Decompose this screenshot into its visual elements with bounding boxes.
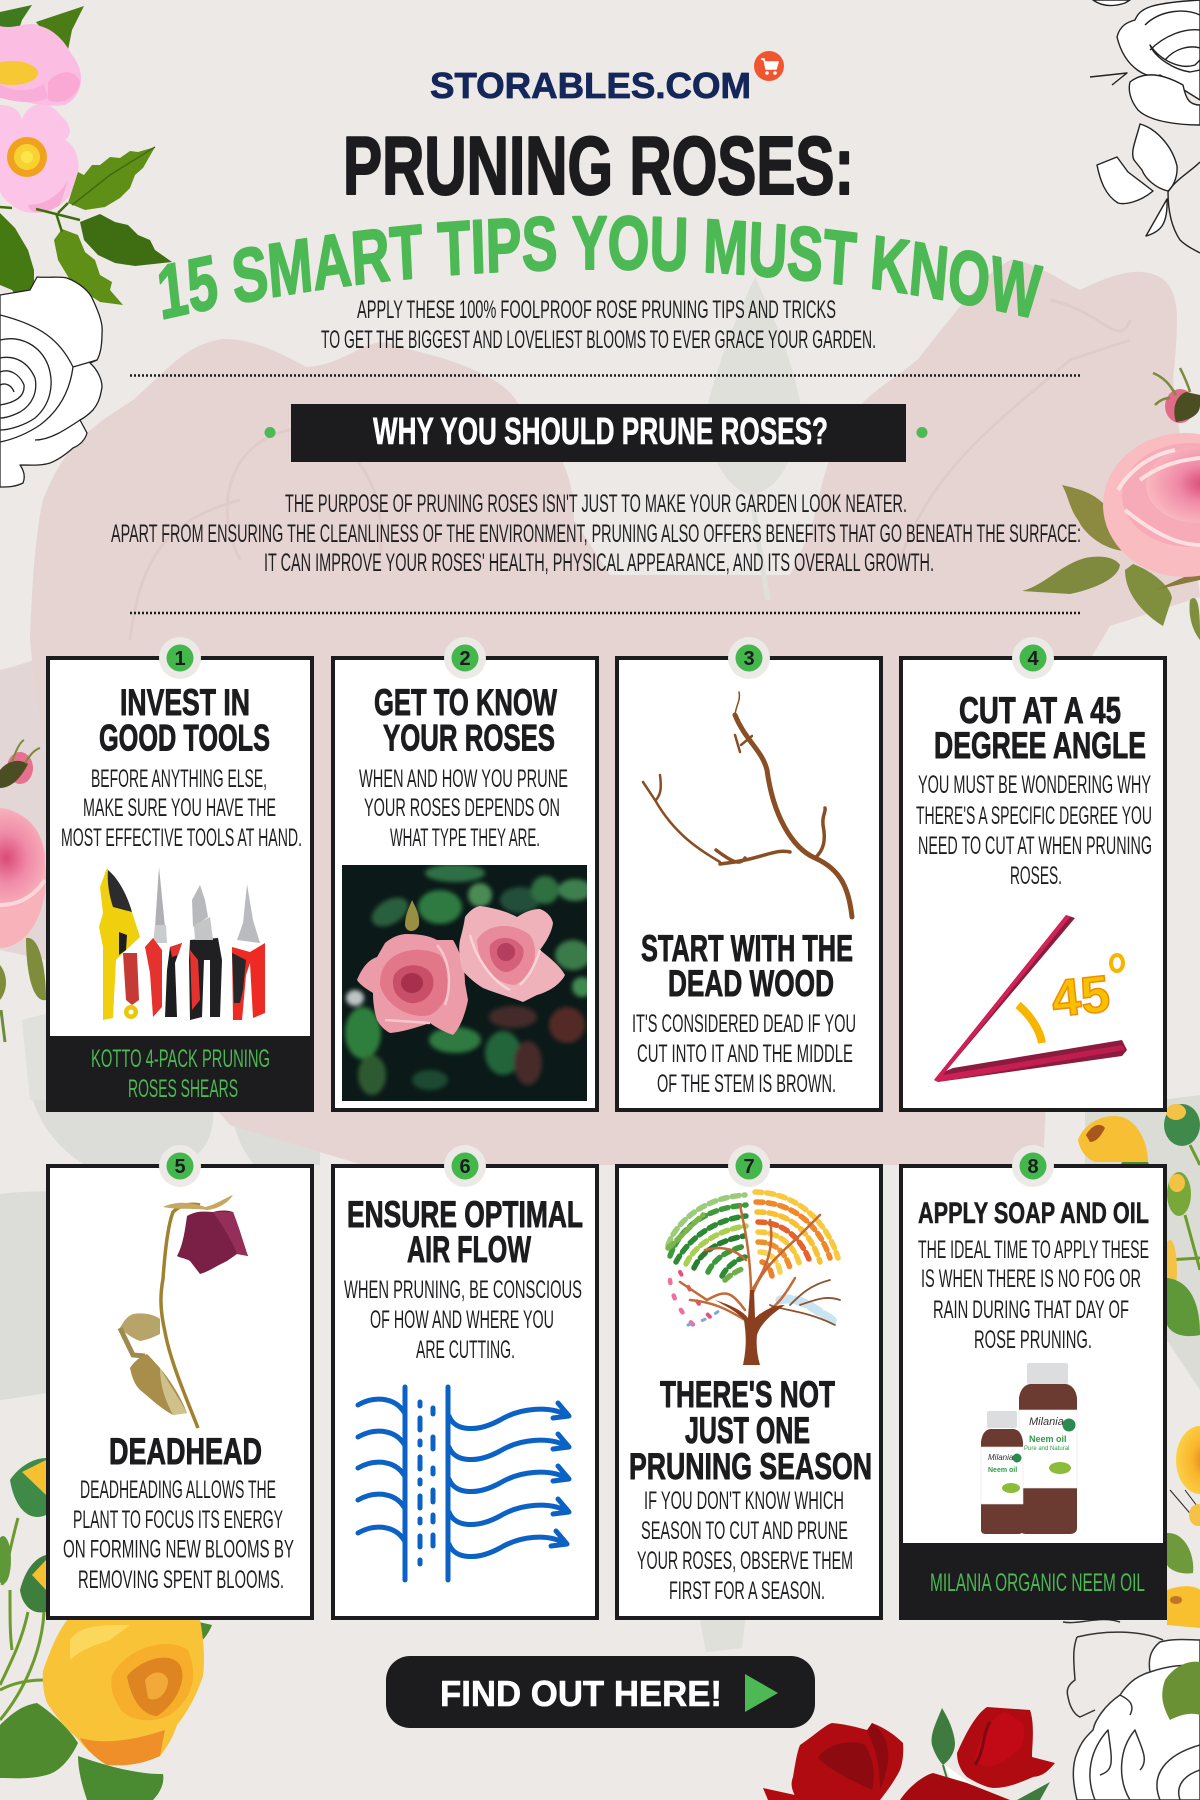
panel: tip 4: ROSES.	[1010, 862, 1062, 890]
panel: tip 1	[46, 637, 314, 1112]
panel: tip 1: GOOD TOOLS	[99, 718, 270, 758]
decoration: bottom-right line-art rose	[1063, 1619, 1200, 1800]
decoration: bottom red roses	[763, 1707, 1055, 1800]
panel: tip 6: ARE CUTTING.	[416, 1336, 515, 1364]
icon: wilted rose	[120, 1195, 248, 1428]
panel: tip 3: IT'S CONSIDERED DEAD IF YOU	[632, 1010, 856, 1038]
icon: neem oil bottles: Neem oil	[1029, 1434, 1067, 1444]
panel: tip 2: 2	[459, 648, 471, 670]
panel: tip 2: WHEN AND HOW YOU PRUNE	[359, 765, 568, 793]
background: faded rose and leaves	[0, 259, 1200, 1652]
panel: tip 1: MOST EFFECTIVE TOOLS AT HAND.	[61, 824, 302, 852]
panel: tip 7: SEASON TO CUT AND PRUNE	[641, 1517, 848, 1545]
panel: tip 7: THERE'S NOT	[660, 1374, 835, 1415]
panel: tip 5: DEADHEADING ALLOWS THE	[80, 1476, 276, 1504]
call to action button	[386, 1656, 815, 1728]
photo: pink roses	[342, 864, 592, 1101]
panel: tip 7	[617, 1145, 881, 1618]
panel: tip 7: IF YOU DON'T KNOW WHICH	[644, 1487, 844, 1515]
petals of lower flower	[0, 104, 78, 213]
panel: tip 6: 6	[459, 1156, 471, 1178]
panel: tip 8	[899, 1145, 1167, 1620]
panel: tip 3: OF THE STEM IS BROWN.	[657, 1070, 836, 1098]
panel: tip 7: PRUNING SEASON	[629, 1446, 872, 1487]
intro text	[321, 296, 876, 354]
icon: neem oil bottles: Milania	[1029, 1416, 1064, 1428]
panel: tip 1: INVEST IN	[120, 682, 250, 723]
icon: dead branch	[643, 692, 852, 917]
panel: tip 4: 4	[1027, 648, 1039, 670]
panel: tip 7: YOUR ROSES, OBSERVE THEM	[637, 1547, 853, 1575]
logo: STORABLES.COM	[430, 65, 751, 106]
decoration: top-left wild pink roses and leaves	[0, 5, 172, 313]
panel: tip 2: GET TO KNOW	[374, 682, 557, 723]
icon: four-season tree	[668, 1192, 840, 1365]
intro text: APPLY THESE 100% FOOLPROOF ROSE PRUNING TIPS AND TRICKS	[357, 296, 836, 324]
serrated leaves	[68, 147, 155, 210]
panel: tip 2: YOUR ROSES	[383, 718, 555, 758]
title: PRUNING ROSES:	[343, 119, 854, 212]
panel: tip 3: START WITH THE	[641, 928, 853, 969]
panel: tip 5: PLANT TO FOCUS ITS ENERGY	[73, 1506, 283, 1534]
curved subtitle: 15 SMART TIPS YOU MUST KNOW	[158, 215, 1044, 320]
icon: neem oil bottles: Milania	[988, 1453, 1014, 1462]
icon: play arrow	[745, 1674, 778, 1712]
decoration: top-right line-art rose	[1090, 0, 1200, 253]
decoration: bottom-left yellow rose	[0, 1620, 212, 1800]
panel: tip 4	[901, 637, 1165, 1110]
panel: tip 4: CUT AT A 45	[959, 690, 1121, 731]
icon: neem oil bottles: Pure and Natural	[1024, 1446, 1069, 1452]
panel: tip 2: WHAT TYPE THEY ARE.	[390, 824, 540, 852]
panel: tip 1: ROSES SHEARS	[128, 1075, 238, 1103]
logo	[430, 51, 784, 106]
call to action button: FIND OUT HERE!	[440, 1673, 722, 1714]
decoration: right yellow roses and foliage	[1078, 1104, 1200, 1628]
icon: 45 degree angle	[934, 915, 1127, 1082]
panel: tip 5: ON FORMING NEW BLOOMS BY	[63, 1536, 294, 1564]
panel: tip 7: JUST ONE	[685, 1410, 810, 1451]
decoration: right pink rose, bud and leaves	[1022, 368, 1200, 640]
panel: tip 3: 3	[743, 648, 755, 670]
panel: tip 6: ENSURE OPTIMAL	[347, 1194, 583, 1235]
section banner	[264, 404, 928, 462]
panel: tip 2: YOUR ROSES DEPENDS ON	[364, 794, 560, 822]
icon: air flow	[358, 1387, 569, 1580]
panel: tip 3	[617, 637, 881, 1110]
icon: neem oil bottles: Neem oil	[988, 1467, 1017, 1474]
panel: tip 1: MAKE SURE YOU HAVE THE	[83, 794, 276, 822]
panel: tip 6: WHEN PRUNING, BE CONSCIOUS	[344, 1276, 582, 1304]
icon: neem oil bottles	[981, 1363, 1077, 1534]
panel: tip 3: CUT INTO IT AND THE MIDDLE	[637, 1040, 853, 1068]
decoration: left yellow buds and stems	[0, 1458, 46, 1720]
panel: tip 8: 8	[1027, 1156, 1039, 1178]
icon: 45 degree angle: 45	[1049, 965, 1113, 1029]
panel: tip 7: FIRST FOR A SEASON.	[669, 1577, 825, 1605]
panel: tip 7: 7	[743, 1156, 755, 1178]
section banner: WHY YOU SHOULD PRUNE ROSES?	[373, 411, 828, 453]
panel: tip 8: ROSE PRUNING.	[974, 1326, 1092, 1354]
icon: pruning shears	[99, 867, 265, 1020]
panel: tip 6	[333, 1145, 597, 1618]
panel: tip 6: AIR FLOW	[407, 1229, 531, 1270]
panel: tip 1: BEFORE ANYTHING ELSE,	[91, 765, 267, 793]
icon: cart badge	[754, 51, 784, 81]
petals of upper flower	[0, 24, 81, 106]
panel: tip 2	[333, 637, 597, 1110]
decoration: left white line-art rose	[0, 277, 102, 487]
panel: tip 5: 5	[174, 1156, 186, 1178]
panel: tip 5: DEADHEAD	[109, 1431, 262, 1472]
panel: tip 6: OF HOW AND WHERE YOU	[370, 1306, 554, 1334]
panel: tip 5	[48, 1145, 312, 1618]
why paragraph	[111, 490, 1081, 577]
panel: tip 1: KOTTO 4-PACK PRUNING	[91, 1045, 270, 1073]
panel: tip 5: REMOVING SPENT BLOOMS.	[78, 1566, 284, 1594]
panel: tip 1: 1	[174, 648, 186, 670]
panel: tip 3: DEAD WOOD	[668, 963, 834, 1004]
decoration: left pink rose	[0, 740, 46, 1042]
